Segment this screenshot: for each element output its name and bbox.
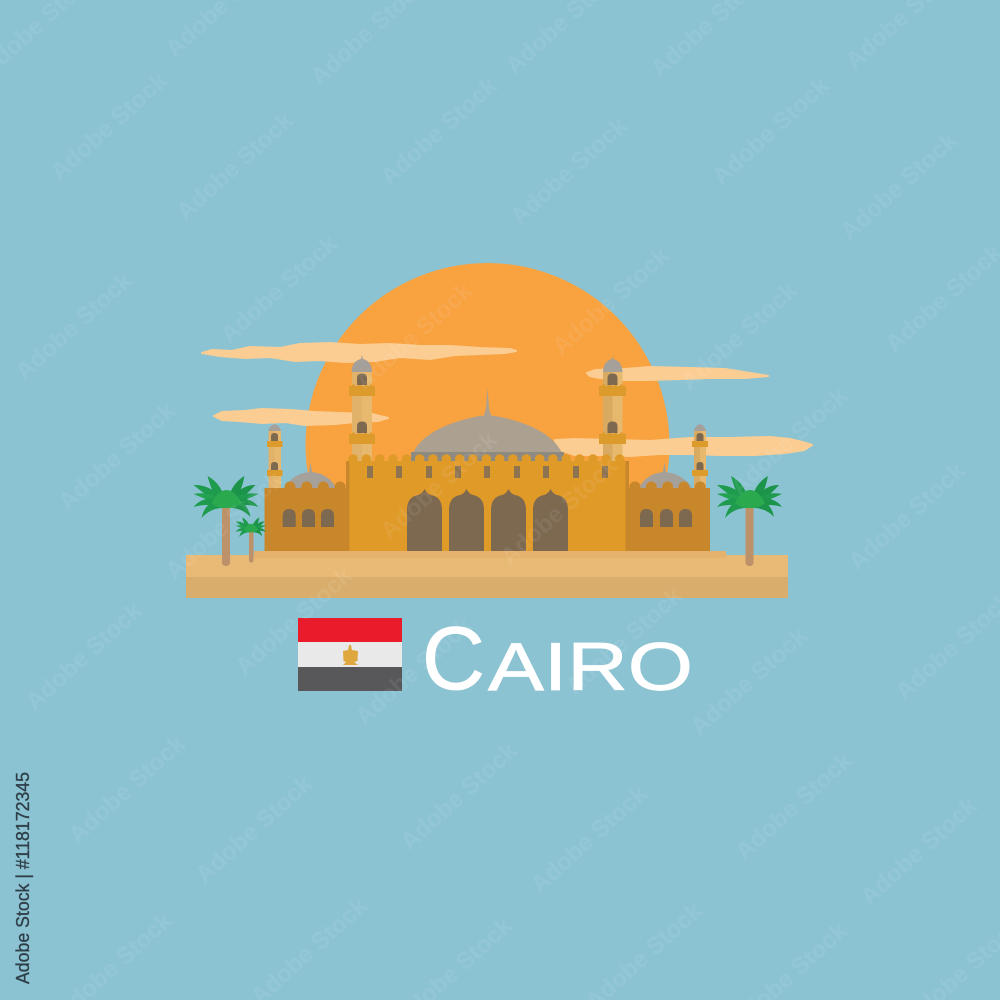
title: Cairo: AIRO	[488, 629, 693, 705]
watermarks: Adobe Stock	[835, 127, 963, 246]
watermarks: Adobe Stock	[547, 242, 675, 361]
minaret: right tall	[599, 355, 626, 462]
dome: right wing	[639, 462, 692, 488]
left wing building	[264, 487, 348, 551]
watermarks: Adobe Stock	[171, 107, 299, 226]
cloud: upper right	[587, 367, 768, 380]
watermarks: Adobe Stock	[725, 382, 853, 501]
watermarks: Adobe Stock	[375, 426, 503, 545]
watermarks: Adobe Stock	[375, 72, 503, 191]
watermarks: Adobe Stock	[525, 780, 653, 899]
watermarks: Adobe Stock	[45, 67, 173, 186]
cloud: upper left	[202, 343, 516, 362]
title: Cairo	[422, 608, 693, 708]
icon: eagle emblem	[343, 645, 358, 665]
minaret: right small	[692, 424, 708, 489]
watermarks: Adobe Stock	[53, 397, 181, 516]
illustration canvas	[15, 263, 813, 984]
title: Cairo: C	[422, 608, 485, 708]
stock id vertical text: Adobe Stock | #118172345	[13, 772, 33, 984]
main fortress wall	[346, 459, 629, 551]
palm: left	[194, 476, 258, 566]
watermarks: Adobe Stock	[190, 770, 318, 889]
arched doors	[407, 489, 568, 551]
palm: small	[235, 517, 266, 562]
watermarks: Adobe Stock	[63, 730, 191, 849]
right wing building	[626, 487, 710, 551]
sun	[306, 263, 670, 488]
watermarks: Adobe Stock	[843, 457, 971, 576]
watermarks: Adobe Stock	[395, 737, 523, 856]
watermarks: Adobe Stock	[560, 582, 688, 701]
watermarks: Adobe Stock	[707, 72, 835, 191]
watermarks: Adobe Stock	[350, 277, 478, 396]
watermarks: Adobe Stock	[10, 267, 138, 386]
cloud: lower left	[214, 409, 388, 425]
watermarks: Adobe Stock	[350, 612, 478, 731]
watermarks: Adobe Stock	[675, 277, 803, 396]
watermarks: Adobe Stock	[685, 622, 813, 741]
watermarks: Adobe Stock	[855, 792, 983, 911]
watermarks: Adobe Stock	[230, 562, 358, 681]
watermarks: Adobe Stock	[730, 747, 858, 866]
main dome	[411, 388, 564, 462]
palm: small trunk base	[249, 550, 254, 562]
watermarks: Adobe Stock	[215, 230, 343, 349]
watermarks: Adobe Stock	[495, 452, 623, 571]
clouds	[202, 343, 812, 456]
minaret: left tall	[349, 355, 375, 462]
watermarks: Adobe Stock	[505, 112, 633, 231]
ground	[186, 551, 788, 598]
wall slit windows	[367, 466, 608, 478]
flag of Egypt	[298, 618, 402, 691]
cloud: lower right	[555, 437, 812, 456]
watermarks: Adobe Stock	[20, 597, 148, 716]
watermarks: Adobe Stock	[160, 466, 288, 585]
minaret: left small	[267, 424, 282, 489]
dome: left wing	[285, 462, 336, 488]
palm: right	[717, 476, 782, 566]
